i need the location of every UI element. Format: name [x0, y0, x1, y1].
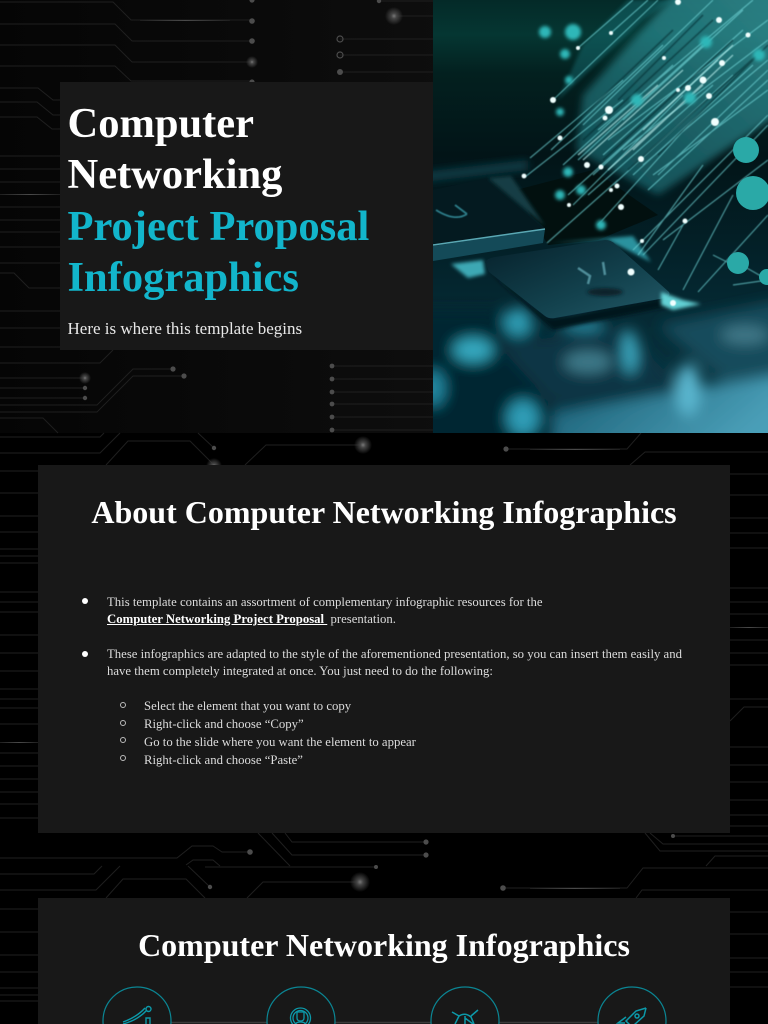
bullet 1: Computer Networking Project Proposal presentation. [107, 612, 396, 626]
title: Computer Networking: Networking [68, 151, 282, 198]
sub-steps list [120, 699, 416, 767]
subtitle: Project Proposal Infographics [68, 202, 369, 301]
heading: about: About Computer Networking Infographics [91, 494, 677, 530]
icon timeline [102, 986, 667, 1024]
panel: infographics preview [38, 898, 730, 1024]
fiber tips and bokeh [522, 0, 768, 306]
title: Computer Networking: Computer [68, 100, 254, 146]
fiber optic bundle [525, 0, 768, 292]
bullet 2: have them completely integrated at once. You just need to do the following: [107, 664, 493, 678]
panel: hero title [60, 82, 433, 350]
sub-steps list: Go to the slide where you want the element to appear [144, 735, 416, 749]
blurred lower keyboard [413, 300, 768, 450]
keys in focus [423, 160, 701, 330]
bullet dot 2 [82, 651, 88, 657]
bullet 2: These infographics are adapted to the style of the aforementioned presentation, so you can insert them easily and [107, 647, 682, 661]
sub-steps list: Select the element that you want to copy [144, 699, 351, 713]
title: Computer Networking [68, 100, 282, 198]
photo: glowing fiber optic strands over a keyboard [433, 0, 768, 433]
icon: growth chart [103, 987, 171, 1024]
icon: person target [267, 987, 335, 1024]
sub-steps list: Right-click and choose “Paste” [144, 753, 303, 767]
subtitle: Project Proposal Infographics: Infographics [68, 254, 299, 301]
icon: rocket [598, 987, 666, 1024]
bullet 1: This template contains an assortment of complementary infographic resources for the [107, 595, 542, 609]
bullet 2 [107, 647, 682, 678]
panel: about [38, 465, 730, 833]
tagline: Here is where this template begins [68, 319, 302, 338]
sub-steps list: Right-click and choose “Copy” [144, 717, 304, 731]
heading: infographics: Computer Networking Infographics [138, 927, 630, 963]
bullet 1 [107, 595, 542, 626]
subtitle: Project Proposal Infographics: Project Proposal [68, 202, 369, 250]
icon: bug [431, 987, 499, 1024]
bullet dot 1 [82, 598, 88, 604]
